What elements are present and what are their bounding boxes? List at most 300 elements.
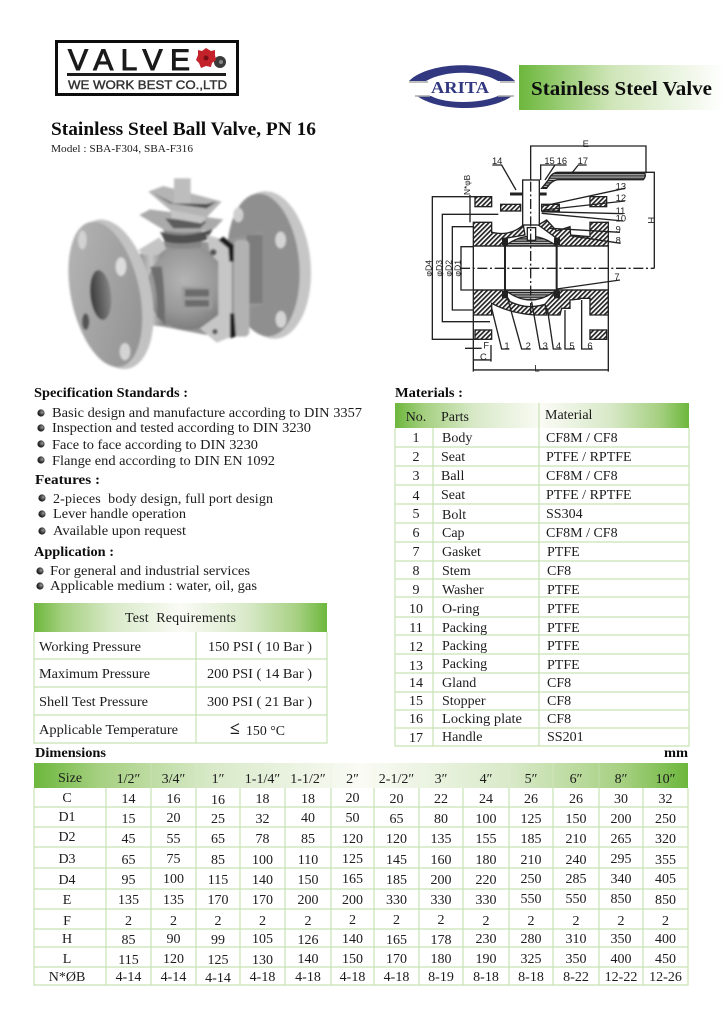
row C: 18 bbox=[256, 792, 270, 807]
row D4: 140 bbox=[252, 873, 273, 888]
row N*OB: 4-14 bbox=[205, 971, 231, 986]
test table header: Test Requirements bbox=[125, 611, 236, 626]
row D1: 65 bbox=[390, 812, 404, 827]
row D2: 120 bbox=[342, 832, 363, 847]
materials rows 1-17: CF8M / CF8 bbox=[546, 469, 618, 484]
drawing: bore and ball lines bbox=[460, 182, 654, 315]
drawing: labels: φD4 bbox=[424, 260, 434, 277]
materials rows 1-17: Stem bbox=[442, 564, 471, 579]
row N*OB: 8-19 bbox=[428, 970, 454, 985]
row N*OB bbox=[49, 970, 682, 986]
row D3: 295 bbox=[610, 852, 632, 867]
row L: 180 bbox=[430, 952, 452, 967]
row H: 140 bbox=[342, 932, 363, 947]
drawing: labels: 13 bbox=[616, 182, 626, 192]
logo: VALVE We Work Best: VALVE bbox=[68, 44, 190, 77]
dimensions header row: 2″ bbox=[346, 772, 359, 787]
row E: 850 bbox=[655, 893, 676, 908]
row L: 125 bbox=[208, 953, 228, 968]
drawing: dimension lines bbox=[432, 146, 654, 372]
row C: 18 bbox=[301, 792, 315, 807]
row N*OB: 8-18 bbox=[518, 970, 544, 985]
materials rows 1-17: Body bbox=[442, 431, 472, 446]
drawing: labels: 17 bbox=[578, 156, 588, 166]
row D2: 210 bbox=[566, 832, 586, 847]
list: application bbox=[36, 564, 257, 594]
row D4: 200 bbox=[430, 873, 452, 888]
materials header: No. bbox=[406, 410, 426, 425]
materials rows 1-17: Packing bbox=[442, 621, 487, 636]
drawing: labels: 8 bbox=[616, 235, 621, 245]
row D4: D4 bbox=[58, 873, 76, 888]
heading: Specification Standards: Specification Standards : bbox=[34, 386, 188, 401]
materials rows 1-17: 13 bbox=[409, 659, 423, 674]
row E: 330 bbox=[430, 893, 452, 908]
materials rows 1-17: SS304 bbox=[546, 507, 583, 522]
row D4: 165 bbox=[342, 872, 363, 887]
row L bbox=[63, 952, 676, 968]
materials rows 1-17: Seat bbox=[441, 450, 465, 465]
row N*OB: N*ØB bbox=[49, 970, 85, 985]
row H: 280 bbox=[520, 932, 542, 947]
row D2 bbox=[58, 830, 676, 847]
row D2: 85 bbox=[301, 832, 315, 847]
row C: 20 bbox=[390, 792, 404, 807]
row D4: 405 bbox=[655, 872, 676, 887]
row E: E bbox=[63, 893, 71, 908]
row D3: 65 bbox=[122, 853, 136, 868]
row F: F bbox=[63, 914, 71, 929]
row D1 bbox=[58, 810, 676, 827]
heading: Materials: Materials : bbox=[395, 386, 463, 401]
drawing: labels: φD3 bbox=[434, 260, 444, 277]
row H: 178 bbox=[430, 933, 452, 948]
row D1: 200 bbox=[610, 812, 632, 827]
row L: 190 bbox=[476, 952, 496, 967]
materials rows 1-17: PTFE / RPTFE bbox=[546, 488, 632, 503]
materials rows 1-17: 10 bbox=[409, 602, 423, 617]
materials rows 1-17: PTFE bbox=[547, 658, 580, 673]
row N*OB: 4-18 bbox=[250, 970, 275, 985]
drawing: leader lines bbox=[492, 165, 625, 349]
list: specification standards: Face to face according to DIN 3230 bbox=[52, 438, 258, 453]
row L: 400 bbox=[610, 952, 632, 967]
test row: applicable temperature: Applicable Temperature bbox=[39, 723, 178, 738]
row F: 2 bbox=[618, 914, 624, 929]
row D2: 65 bbox=[211, 832, 225, 847]
row F: 2 bbox=[170, 914, 177, 929]
row D3: 180 bbox=[476, 853, 496, 868]
row E: 135 bbox=[163, 893, 184, 908]
unit label: mm: mm bbox=[664, 746, 688, 761]
row F: 2 bbox=[572, 914, 580, 929]
row D3: 210 bbox=[520, 853, 542, 868]
drawing: labels: 14 bbox=[492, 156, 502, 166]
materials rows 1-17: 6 bbox=[412, 526, 420, 541]
drawing: labels: 7 bbox=[614, 272, 620, 282]
panel: materials table bbox=[395, 403, 689, 746]
row D1: 25 bbox=[211, 812, 225, 827]
row C: 32 bbox=[658, 792, 672, 807]
row H: 350 bbox=[610, 932, 632, 947]
row D2: 120 bbox=[386, 832, 407, 847]
dimensions header row: 1-1/4″ bbox=[245, 772, 280, 787]
materials header: Parts bbox=[441, 410, 469, 425]
row D3: 85 bbox=[211, 853, 225, 868]
row F: 2 bbox=[393, 913, 400, 928]
drawing: labels: H bbox=[646, 217, 656, 224]
row N*OB: 8-18 bbox=[473, 970, 499, 985]
panel: test requirements table bbox=[34, 603, 327, 743]
row N*OB: 4-14 bbox=[116, 970, 141, 985]
drawing: labels: 16 bbox=[557, 156, 567, 166]
drawing: labels: φD1 bbox=[453, 260, 463, 277]
row D2: 155 bbox=[476, 832, 496, 847]
drawing: labels: L bbox=[534, 364, 540, 374]
row C: 20 bbox=[346, 791, 360, 806]
row E: 135 bbox=[118, 893, 139, 908]
row N*OB: 4-18 bbox=[340, 970, 365, 985]
row D3: 100 bbox=[252, 853, 273, 868]
materials rows 1-17: O-ring bbox=[442, 602, 479, 617]
drawing: labels: 1 bbox=[504, 341, 510, 351]
row L: 150 bbox=[342, 952, 363, 967]
materials rows 1-17: CF8 bbox=[547, 564, 571, 579]
row D2: 55 bbox=[166, 832, 180, 847]
materials rows 1-17: 1 bbox=[412, 431, 420, 446]
row F: 2 bbox=[304, 914, 312, 929]
dimensions header row: 3/4″ bbox=[162, 772, 186, 787]
materials rows 1-17: 3 bbox=[412, 469, 420, 484]
materials rows 1-17: PTFE / RPTFE bbox=[546, 450, 632, 465]
row D1: 150 bbox=[566, 812, 586, 827]
drawing: labels: 4 bbox=[556, 341, 561, 351]
row C bbox=[62, 791, 672, 808]
drawing: labels bbox=[424, 139, 656, 374]
banner: Stainless Steel Valve bbox=[519, 65, 724, 110]
dimensions header row: 3″ bbox=[435, 772, 448, 787]
row E: 170 bbox=[208, 893, 228, 908]
drawing: labels: 6 bbox=[587, 341, 593, 351]
drawing: labels: C bbox=[480, 352, 487, 362]
row N*OB: 4-18 bbox=[384, 970, 409, 985]
row D3: 75 bbox=[166, 852, 180, 867]
drawing: labels: 15 bbox=[544, 156, 555, 166]
drawing: labels: N*φB bbox=[462, 174, 472, 195]
materials rows 1-17: PTFE bbox=[547, 639, 580, 654]
test row: working pressure bbox=[39, 640, 312, 655]
row C: C bbox=[62, 791, 72, 806]
row E: 330 bbox=[386, 893, 407, 908]
banner: Stainless Steel Valve: Stainless Steel Valve bbox=[531, 78, 712, 100]
drawing: labels: 9 bbox=[616, 224, 621, 234]
row F: 2 bbox=[214, 914, 222, 929]
row H: 400 bbox=[655, 932, 676, 947]
row L: 130 bbox=[252, 953, 273, 968]
logo: ARITA bbox=[409, 65, 515, 108]
list: features: Lever handle operation bbox=[53, 507, 186, 522]
row D1: 40 bbox=[301, 811, 315, 826]
row E: 550 bbox=[520, 892, 542, 907]
dimensions header row: 10″ bbox=[656, 772, 676, 787]
row D4: 250 bbox=[520, 872, 542, 887]
row C: 22 bbox=[434, 792, 448, 807]
title: Stainless Steel Ball Valve, PN 16 bbox=[51, 120, 316, 140]
row D4: 185 bbox=[386, 873, 407, 888]
heading: Application: Application : bbox=[34, 545, 114, 560]
row D3 bbox=[58, 852, 676, 868]
row F bbox=[63, 913, 669, 929]
test row: applicable temperature bbox=[39, 718, 285, 739]
row D1: 20 bbox=[166, 811, 180, 826]
materials rows 1-17: 17 bbox=[409, 731, 423, 746]
row C: 26 bbox=[569, 792, 583, 807]
dimensions header row: 8″ bbox=[615, 772, 628, 787]
drawing: labels: E bbox=[583, 139, 589, 149]
row F: 2 bbox=[125, 914, 132, 929]
row D2: 265 bbox=[610, 832, 632, 847]
row L: 350 bbox=[566, 952, 586, 967]
materials rows 1-17: CF8 bbox=[547, 676, 571, 691]
drawing: labels: F bbox=[483, 340, 489, 350]
row D3: 355 bbox=[655, 853, 676, 868]
row D1: 15 bbox=[122, 812, 136, 827]
test row: working pressure: Working Pressure bbox=[39, 640, 141, 655]
materials rows 1-17: 8 bbox=[412, 564, 420, 579]
materials rows 1-17: Bolt bbox=[442, 508, 466, 523]
test row: working pressure: 150 PSI ( 10 Bar ) bbox=[208, 640, 312, 655]
row N*OB: 4-14 bbox=[161, 970, 186, 985]
materials header bbox=[395, 403, 689, 428]
row N*OB: 8-22 bbox=[563, 970, 589, 985]
row H bbox=[62, 932, 676, 948]
drawing: labels: 2 bbox=[526, 341, 531, 351]
row D4: 150 bbox=[298, 873, 318, 888]
row F: 2 bbox=[528, 914, 534, 929]
row F: 2 bbox=[662, 914, 669, 929]
dimensions header row: 4″ bbox=[480, 772, 493, 787]
row D1: 250 bbox=[655, 812, 676, 827]
logo: ARITA: ARITA bbox=[431, 78, 489, 97]
materials rows 1-17: 7 bbox=[412, 545, 420, 560]
drawing: labels: 5 bbox=[569, 341, 575, 351]
row E: 170 bbox=[252, 893, 273, 908]
row H: 90 bbox=[166, 932, 180, 947]
materials rows 1-17: 2 bbox=[412, 450, 420, 465]
test row: applicable temperature: ≤ bbox=[230, 718, 240, 738]
row D4: 220 bbox=[476, 873, 496, 888]
test row: applicable temperature: 150 °C bbox=[246, 724, 285, 739]
row F: 2 bbox=[438, 913, 444, 928]
row C: 30 bbox=[614, 792, 628, 807]
row D4: 285 bbox=[566, 872, 586, 887]
row E: 200 bbox=[298, 893, 318, 908]
dimensions header row bbox=[34, 763, 688, 788]
model subtitle: Model : SBA-F304, SBA-F316 bbox=[51, 143, 194, 155]
test row: maximum pressure: 200 PSI ( 14 Bar ) bbox=[207, 667, 312, 682]
drawing: labels: 10 bbox=[616, 214, 626, 224]
row L: L bbox=[63, 952, 71, 967]
drawing: labels: 11 bbox=[616, 206, 625, 216]
row D2: 185 bbox=[520, 832, 542, 847]
row N*OB: 12-26 bbox=[649, 970, 682, 985]
row D4: 340 bbox=[610, 872, 632, 887]
row H: 105 bbox=[252, 932, 273, 947]
row L: 450 bbox=[655, 952, 676, 967]
row C: 16 bbox=[166, 792, 180, 807]
materials rows 1-17: Ball bbox=[441, 469, 464, 484]
logo: VALVE We Work Best: WE WORK BEST CO.,LTD bbox=[68, 78, 227, 92]
row D3: 160 bbox=[430, 853, 452, 868]
row D4: 115 bbox=[208, 873, 228, 888]
drawing: body sections bbox=[473, 172, 645, 339]
technical drawing: valve cross-section bbox=[424, 139, 656, 374]
materials rows 1-17: Stopper bbox=[442, 694, 486, 709]
materials rows 1-17: CF8 bbox=[547, 694, 571, 709]
row D3: 125 bbox=[342, 852, 363, 867]
dimensions header row: 1-1/2″ bbox=[290, 772, 326, 787]
materials rows 1-17: 9 bbox=[412, 583, 420, 598]
materials rows 1-17: PTFE bbox=[547, 583, 580, 598]
drawing: labels: 12 bbox=[616, 193, 626, 203]
test row: maximum pressure bbox=[39, 667, 312, 682]
list: features: 2-pieces body design, full port design bbox=[53, 492, 273, 507]
materials rows 1-17: CF8 bbox=[547, 712, 571, 727]
row D1: 100 bbox=[476, 812, 496, 827]
materials rows 1-17: 12 bbox=[409, 640, 423, 655]
row D1: 80 bbox=[434, 812, 448, 827]
dimensions header row: Size bbox=[58, 771, 82, 786]
materials rows 1-17: Packing bbox=[442, 657, 487, 672]
row D2: D2 bbox=[58, 830, 76, 845]
test row: shell test pressure: Shell Test Pressure bbox=[39, 695, 148, 710]
materials rows 1-17: 4 bbox=[412, 489, 420, 504]
materials rows 1-17: Washer bbox=[442, 583, 484, 598]
row H: 230 bbox=[476, 932, 496, 947]
list: features: Available upon request bbox=[53, 524, 186, 539]
test row: shell test pressure bbox=[39, 695, 312, 710]
row L: 140 bbox=[298, 952, 318, 967]
row D3: 240 bbox=[566, 853, 586, 868]
materials rows 1-17: Gasket bbox=[442, 545, 481, 560]
materials rows 1-17: 14 bbox=[409, 676, 423, 691]
row D2: 45 bbox=[122, 832, 136, 847]
row C: 16 bbox=[211, 793, 225, 808]
row D2: 320 bbox=[655, 832, 676, 847]
row D1: 32 bbox=[256, 812, 270, 827]
row H: H bbox=[62, 932, 72, 947]
materials rows 1-17: 15 bbox=[409, 694, 423, 709]
drawing: labels: φD2 bbox=[444, 260, 454, 277]
list: application: For general and industrial services bbox=[50, 564, 250, 579]
row D1: D1 bbox=[58, 810, 76, 825]
materials rows 1-17: Cap bbox=[442, 526, 465, 541]
materials rows 1-17: PTFE bbox=[547, 545, 580, 560]
row H: 85 bbox=[122, 933, 136, 948]
row D2: 135 bbox=[430, 832, 452, 847]
panel: dimensions table bbox=[34, 763, 688, 986]
materials rows 1-17 bbox=[409, 431, 632, 746]
row D3: 110 bbox=[298, 853, 318, 868]
list: specification standards bbox=[37, 406, 362, 469]
row H: 310 bbox=[566, 932, 586, 947]
row D1: 50 bbox=[346, 811, 360, 826]
heading: Features: Features : bbox=[35, 473, 100, 488]
list: specification standards: Inspection and tested according to DIN 3230 bbox=[52, 421, 311, 436]
dimensions header row: 2-1/2″ bbox=[379, 772, 414, 787]
row N*OB: 4-18 bbox=[295, 970, 321, 985]
row E bbox=[63, 892, 676, 908]
test table header bbox=[34, 603, 327, 632]
materials rows 1-17: SS201 bbox=[547, 730, 584, 745]
row D1: 125 bbox=[520, 812, 542, 827]
row H: 126 bbox=[298, 933, 318, 948]
row E: 200 bbox=[342, 893, 363, 908]
row C: 26 bbox=[524, 792, 538, 807]
list: application: Applicable medium : water, oil, gas bbox=[50, 579, 257, 594]
materials rows 1-17: Seat bbox=[441, 488, 465, 503]
materials rows 1-17: PTFE bbox=[547, 621, 580, 636]
row F: 2 bbox=[482, 914, 490, 929]
materials rows 1-17: PTFE bbox=[547, 602, 580, 617]
row E: 850 bbox=[610, 892, 632, 907]
row D3: D3 bbox=[58, 852, 76, 867]
dimensions header row: 5″ bbox=[525, 772, 538, 787]
row E: 330 bbox=[476, 893, 496, 908]
row D4: 100 bbox=[163, 872, 184, 887]
row C: 24 bbox=[479, 792, 493, 807]
test row: maximum pressure: Maximum Pressure bbox=[39, 667, 150, 682]
dimensions header row: 1″ bbox=[212, 772, 225, 787]
materials rows 1-17: Packing bbox=[442, 639, 487, 654]
row L: 325 bbox=[520, 952, 542, 967]
list: features bbox=[38, 492, 273, 539]
photo: stainless steel ball valve bbox=[56, 178, 317, 377]
row H: 99 bbox=[211, 933, 225, 948]
row F: 2 bbox=[349, 913, 356, 928]
materials rows 1-17: 5 bbox=[412, 507, 420, 522]
row N*OB: 12-22 bbox=[605, 970, 637, 985]
heading: Dimensions: Dimensions bbox=[35, 746, 107, 761]
row F: 2 bbox=[259, 914, 266, 929]
materials header: Material bbox=[545, 408, 593, 423]
row D2: 78 bbox=[256, 832, 270, 847]
row L: 120 bbox=[163, 952, 184, 967]
list: specification standards: Basic design and manufacture according to DIN 3357 bbox=[52, 406, 362, 421]
logo: VALVE We Work Best bbox=[56, 42, 238, 94]
materials rows 1-17: 16 bbox=[409, 712, 423, 727]
materials rows 1-17: CF8M / CF8 bbox=[546, 526, 618, 541]
row H: 165 bbox=[386, 933, 407, 948]
row D3: 145 bbox=[386, 853, 407, 868]
row L: 115 bbox=[118, 953, 139, 968]
materials rows 1-17: CF8M / CF8 bbox=[546, 431, 618, 446]
materials rows 1-17: 11 bbox=[409, 621, 423, 636]
drawing: labels: 3 bbox=[543, 341, 548, 351]
row C: 14 bbox=[122, 792, 136, 807]
dimensions header row: 6″ bbox=[570, 772, 583, 787]
materials rows 1-17: Handle bbox=[442, 730, 482, 745]
dimensions header row: 1/2″ bbox=[117, 772, 141, 787]
row D4: 95 bbox=[122, 873, 136, 888]
list: specification standards: Flange end according to DIN EN 1092 bbox=[52, 454, 275, 469]
row D4 bbox=[58, 872, 676, 888]
row E: 550 bbox=[566, 892, 586, 907]
test row: shell test pressure: 300 PSI ( 21 Bar ) bbox=[207, 695, 312, 710]
materials rows 1-17: Gland bbox=[442, 676, 476, 691]
row L: 170 bbox=[386, 952, 407, 967]
materials rows 1-17: Locking plate bbox=[442, 712, 522, 727]
